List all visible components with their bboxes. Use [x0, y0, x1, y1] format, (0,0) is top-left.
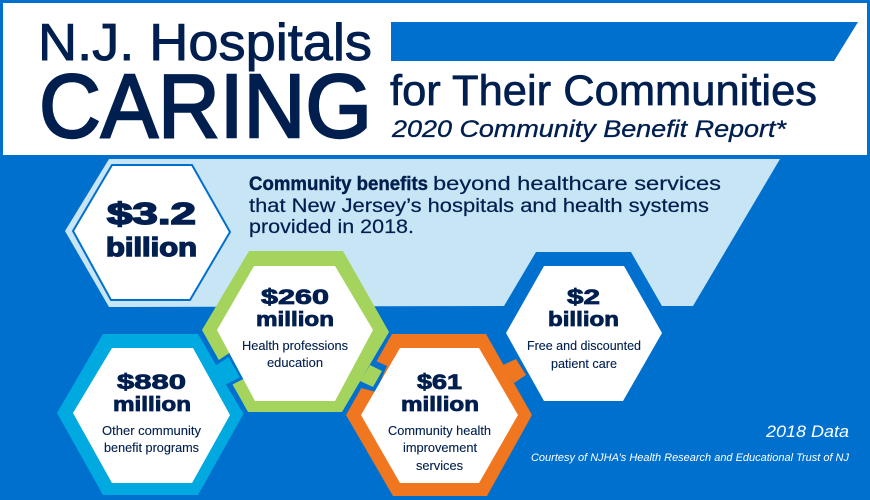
amount: $3.2: [107, 196, 196, 231]
title line: CARING: CARING: [39, 57, 372, 157]
hexagon shape: [73, 165, 230, 300]
unit: billion: [548, 309, 619, 331]
intro text: [249, 174, 721, 238]
label line one: Community health: [388, 423, 491, 438]
label line two: patient care: [551, 356, 617, 371]
label line one: Free and discounted: [527, 338, 641, 353]
white hexagon: [217, 266, 373, 401]
connector tab: green into orange: [360, 365, 382, 387]
line three: provided in 2018.: [249, 217, 414, 238]
unit: million: [256, 309, 334, 331]
header panel: [3, 3, 867, 157]
subtitle: 2020 Community Benefit Report*: [391, 116, 787, 143]
label line one: Health professions: [242, 338, 348, 353]
card: $260 million: [217, 266, 373, 401]
card: $61 million: [361, 348, 518, 483]
unit: million: [401, 394, 479, 416]
card: $2 billion: [506, 266, 662, 401]
panel: $880 million hexagon outer: [57, 334, 244, 495]
header white box: [3, 3, 867, 155]
panel: $260 million hexagon outer: [202, 251, 389, 412]
line two: that New Jersey’s hospitals and health systems: [249, 196, 709, 217]
white hexagon: [506, 266, 662, 401]
white hexagon: [73, 348, 230, 483]
source credit: Courtesy of NJHA’s Health Research and Educational Trust of NJ: [531, 452, 849, 464]
panel: $61 million hexagon outer: [346, 334, 532, 496]
white hexagon: [361, 348, 518, 483]
gap between orange hexagon and green tab: [361, 361, 387, 392]
connector outline: [209, 350, 246, 415]
unit: million: [113, 394, 191, 416]
connector tab: orange toward $2: [503, 359, 526, 383]
panel: light blue intro band: [65, 159, 780, 307]
label line one: Other community: [102, 423, 202, 438]
blue banner shape: [391, 22, 858, 61]
label line two: improvement: [403, 440, 477, 455]
unit: billion: [106, 232, 197, 262]
amount: $2: [567, 286, 600, 309]
card: $880 million: [73, 348, 230, 483]
amount: $61: [417, 371, 462, 394]
title line: for Their Communities: for Their Communities: [390, 67, 817, 115]
data year note: 2018 Data: [765, 423, 849, 441]
title line: N.J. Hospitals: N.J. Hospitals: [38, 14, 372, 72]
connector tab: cyan into green: [214, 355, 242, 405]
amount: $880: [117, 371, 186, 394]
line one remainder: beyond healthcare services: [433, 174, 721, 195]
label line two: education: [267, 355, 323, 370]
panel: $3.2 billion hexagon: [73, 165, 230, 300]
label line two: benefit programs: [104, 440, 199, 455]
label line three: services: [416, 458, 463, 473]
amount: $260: [261, 286, 329, 309]
bold lead-in: Community benefits: [249, 174, 428, 195]
